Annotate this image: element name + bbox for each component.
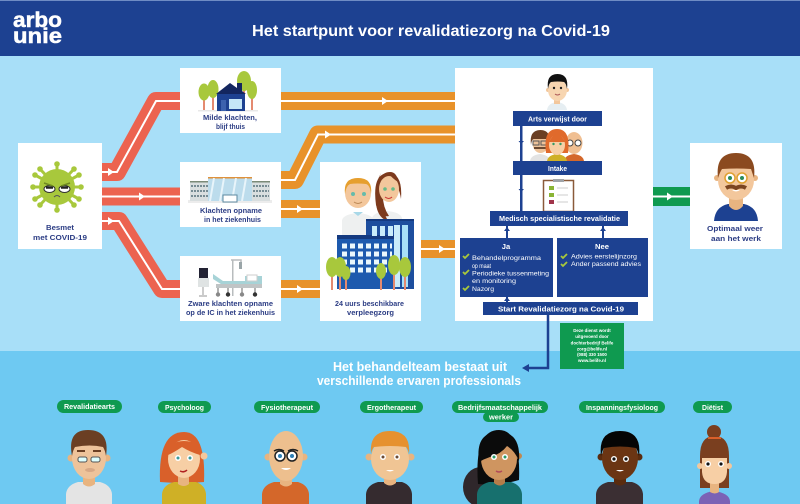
icon: team of three [530,129,584,161]
panel: 24 uurs verpleegzorg [320,162,421,321]
heading: behandelteam [317,360,521,388]
icon: nurses and building [326,172,414,290]
box: ja [460,238,553,297]
bar: start revalidatiezorg: Start Revalidatiezorg na Covid-19 [498,304,624,314]
callout: belife service: zorg@belife.nl [577,346,607,352]
label: 24 uurs beschikbare [335,299,404,308]
label pill: Revalidatiearts [64,402,115,411]
logo: arbo unie: arbo [13,9,62,32]
arrows: red from infected box [102,101,180,289]
icon: doctor [546,74,569,110]
label [707,224,763,243]
icon: happy man [714,153,758,221]
box: ja: Periodieke tussenmeting [472,270,549,278]
box: nee: Ander passend advies [571,261,642,268]
callout: belife service: uitgevoerd door [575,334,609,339]
person: ergotherapeut [360,401,423,504]
callout: belife service: dochterbedrijf Belife [571,340,614,346]
label pill: Fysiotherapeut [261,403,314,412]
icon: house with trees [198,71,258,112]
box: ja: Ja [502,242,511,251]
heading: behandelteam: verschillende ervaren professionals [317,374,521,388]
icon: hospital [188,177,272,203]
label pill: Ergotherapeut [367,403,417,412]
label: met COVID-19 [33,233,87,242]
person: dietist [693,401,732,504]
title: Het startpunt voor revalidatiezorg na Covid-19 [252,23,610,40]
label [33,223,87,242]
callout: belife service: Deze dienst wordt [573,328,611,333]
logo: arbo unie [13,9,62,48]
person: fysiotherapeut [254,401,320,504]
label pill: Inspanningsfysioloog [586,403,658,412]
label: op de IC in het ziekenhuis [186,308,275,317]
label: Klachten opname [200,206,262,215]
box: ja: Behandelprogramma [472,255,541,262]
bar: medisch specialistische revalidatie: Medisch specialistische revalidatie [499,214,620,223]
panel: milde klachten [180,68,281,133]
label: blijf thuis [216,122,245,131]
person: inspanningsfysioloog [579,401,665,504]
label pill [452,401,548,422]
panel: zware klachten [180,256,281,321]
box: ja: op maat [472,263,491,270]
callout: belife service: www.belife.nl [577,358,606,363]
label pill: Bedrijfsmaatschappelijk [458,403,543,412]
arrow: to treatment team [522,315,548,372]
flow connectors [504,126,606,302]
arrow: green to work [653,187,690,206]
logo: arbo unie: unie [13,25,62,48]
box: nee: Nee [595,242,609,251]
bar: start revalidatiezorg [483,302,638,315]
person: revalidatiearts [57,400,122,504]
box: nee: Advies eerstelijnzorg [571,254,637,260]
callout: belife service: (088) 330 1500 [577,352,607,357]
label pill: Psycholoog [165,403,204,412]
bar: arts verwijst door: Arts verwijst door [528,114,587,124]
box: nee [557,238,648,297]
label [186,299,275,317]
label: aan het werk [711,234,762,243]
panel: klachten opname [180,162,281,227]
bar: intake [513,161,602,175]
label: Optimaal weer [707,224,763,233]
label pill: Diëtist [702,403,723,412]
person: bedrijfsmaatschappelijk werker [452,401,548,504]
person: psycholoog [158,401,211,504]
box: ja: en monitoring [472,278,516,285]
box: ja: Nazorg [472,286,494,293]
bar: intake: Intake [548,164,567,173]
panel: optimaal weer aan het werk [690,143,782,249]
icon: hospital bed [198,260,262,297]
label: Zware klachten opname [188,299,273,308]
icon: clipboard [544,179,574,212]
bar: medisch specialistische revalidatie [490,211,628,226]
label pill: werker [488,412,513,422]
header banner [0,0,800,56]
callout: belife service [560,323,624,369]
label [335,299,404,317]
label: Besmet [46,223,74,232]
icon: virus [30,161,84,213]
label: Milde klachten, [203,113,257,122]
arrows: orange towards care [281,97,455,293]
label: in het ziekenhuis [204,215,261,224]
panel: besmet met COVID-19 [18,143,102,249]
panel: revalidatie process [455,68,653,321]
label [203,113,257,131]
heading: behandelteam: Het behandelteam bestaat uit [333,360,508,374]
label [200,206,262,224]
label: verpleegzorg [347,308,394,317]
bar: arts verwijst door [513,111,602,126]
